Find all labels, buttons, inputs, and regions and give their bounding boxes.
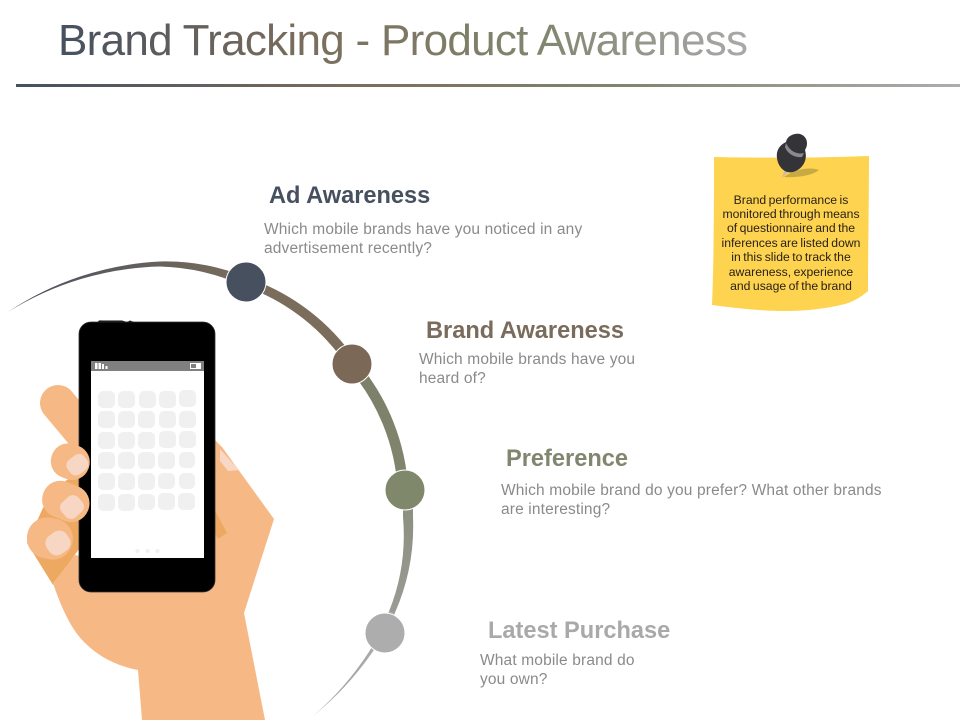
pin: head [777, 134, 807, 172]
hand: thumb nail [220, 449, 239, 471]
node: preference [385, 470, 425, 510]
text: ad awareness: advertisement recently? [264, 240, 432, 256]
pin: shadow [784, 168, 819, 177]
note text: monitored through means [722, 207, 860, 221]
node: latest purchase [365, 613, 405, 653]
text: latest purchase [480, 652, 635, 688]
hand: finger shading [27, 470, 82, 585]
note: paper [712, 156, 869, 311]
node: ad awareness [226, 262, 266, 302]
node: brand awareness [332, 344, 372, 384]
phone: app icon grid [98, 390, 196, 511]
hand: finger one over phone [46, 439, 95, 485]
note text: awareness, experience [729, 265, 853, 279]
arc segment: left tail [8, 261, 247, 312]
note text: Brand performance is [734, 192, 848, 206]
text: brand awareness [419, 350, 635, 386]
note text: in this slide to track the [731, 250, 851, 264]
heading: preference: Preference [506, 446, 628, 472]
hand: finger two over phone [37, 475, 95, 528]
note text: and usage of the brand [730, 279, 852, 293]
text: preference: are interesting? [501, 500, 610, 518]
title rule [16, 84, 960, 87]
heading: brand awareness: Brand Awareness [426, 318, 624, 344]
phone: page dots [136, 549, 160, 553]
text: latest purchase: you own? [480, 670, 548, 688]
arc segment: bottom tail [313, 611, 395, 716]
note text [722, 192, 860, 293]
arc segment: ad to brand [245, 278, 356, 368]
title: Brand Tracking - Product Awareness [58, 16, 748, 65]
heading: latest purchase: Latest Purchase [488, 618, 670, 644]
text: preference [501, 482, 882, 518]
hand: index finger [58, 403, 104, 458]
phone: status bar [91, 361, 204, 371]
text: latest purchase: What mobile brand do [480, 652, 635, 668]
text: brand awareness: heard of? [419, 370, 486, 386]
arc segment: brand to preference [348, 360, 408, 490]
heading: ad awareness: Ad Awareness [269, 182, 430, 208]
pin: needle [782, 168, 790, 178]
phone: top buttons [98, 320, 134, 322]
text: ad awareness: Which mobile brands have you noticed in any [264, 220, 582, 238]
note text: inferences are listed down [722, 236, 860, 250]
phone [79, 320, 215, 592]
phone: screen [91, 361, 204, 558]
hand: finger three over palm [23, 514, 77, 563]
hand: side shading [210, 505, 227, 539]
phone: body [79, 322, 215, 592]
text: ad awareness [264, 220, 582, 256]
arc segment: preference to purchase [384, 490, 413, 633]
text: preference: Which mobile brand do you prefer? What other brands [501, 482, 882, 498]
hand: palm and wrist [53, 440, 274, 720]
text: brand awareness: Which mobile brands have you [419, 350, 635, 368]
note text: of questionnaire and the [727, 221, 855, 235]
